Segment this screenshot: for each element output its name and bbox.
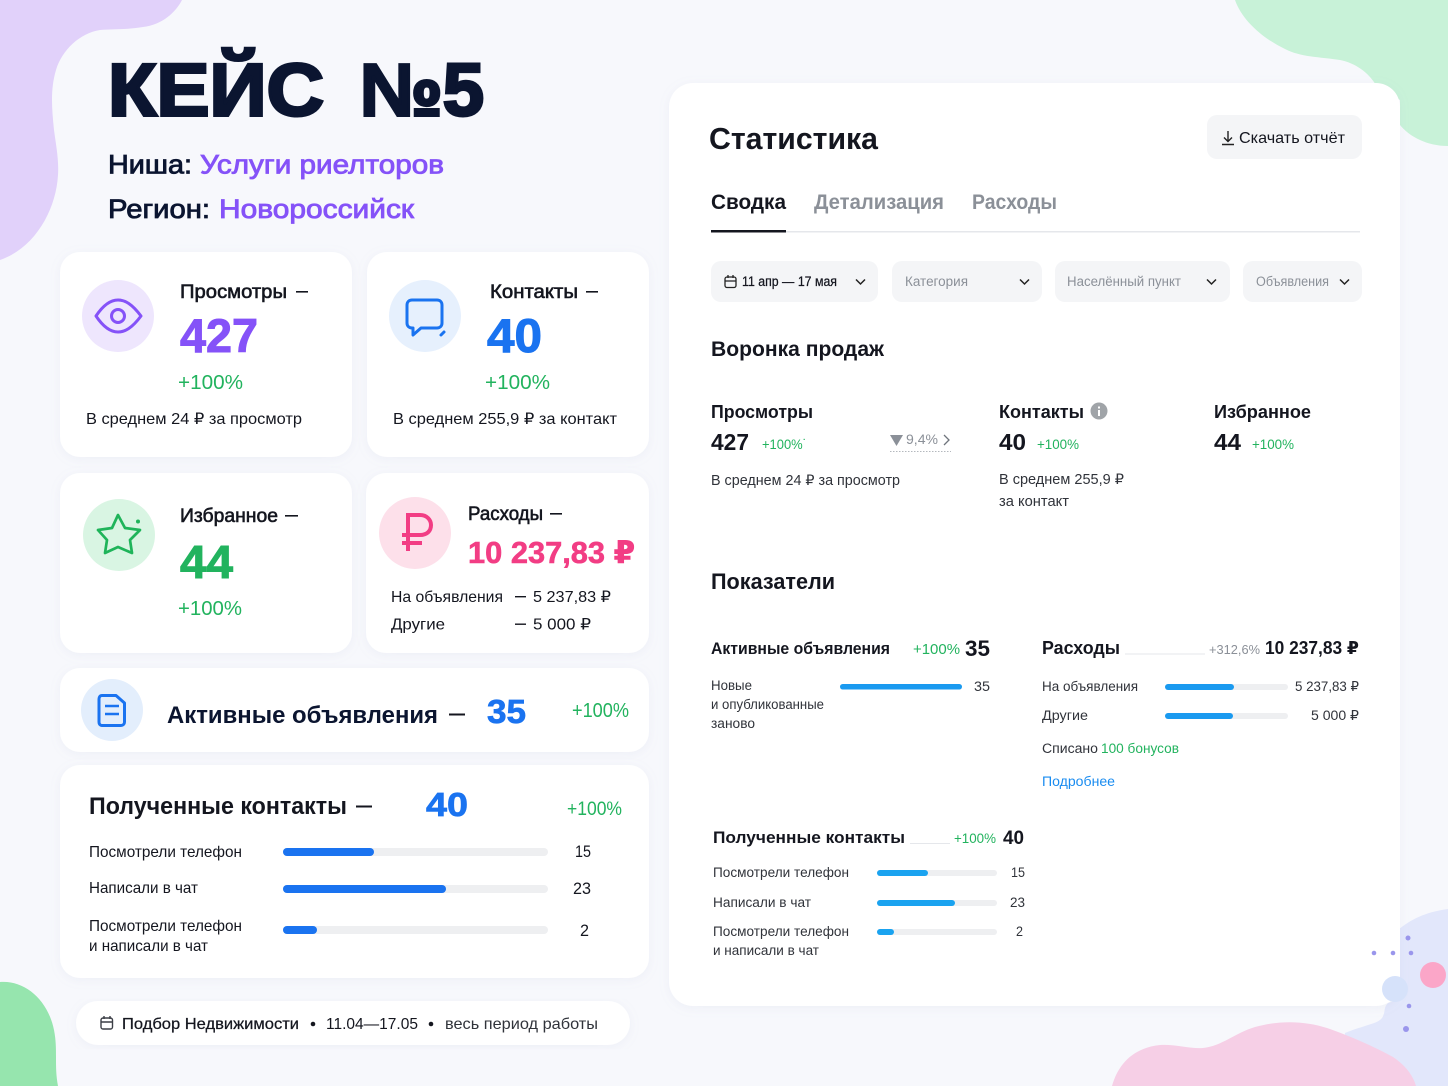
panel: contacts: Контакты <box>490 281 578 303</box>
funnel: favourites: +100% <box>1252 436 1294 452</box>
heading: sales funnel: Воронка продаж <box>711 338 885 361</box>
panel: active ads <box>60 668 649 752</box>
indicator: expenses: Другие <box>1042 708 1088 723</box>
panel: active ads: 35 <box>487 693 526 730</box>
funnel: views: +100%˙ <box>762 436 807 452</box>
panel: expenses: Расходы <box>468 504 543 525</box>
panel: favourites <box>60 473 352 653</box>
row: viewed phone <box>89 843 591 861</box>
indicator: expenses: 100 бонусов <box>1101 741 1179 756</box>
tabs: Сводка <box>711 191 786 214</box>
icon: calendar <box>101 1016 112 1029</box>
panel: favourites: 44 <box>180 536 233 588</box>
row: wrote in chat: 23 <box>573 880 591 898</box>
indicator: received contacts: 40 <box>1003 828 1024 849</box>
panel: views: +100% <box>178 371 243 394</box>
niche line: Услуги риелторов <box>200 150 444 180</box>
title <box>108 48 484 132</box>
indicator: active ads: и опубликованные <box>711 697 824 712</box>
footer pill: Подбор Недвижимости <box>122 1016 299 1033</box>
panel: views: В среднем 24 ₽ за просмотр <box>86 411 302 428</box>
filter: ads <box>1243 261 1362 302</box>
filter: date: 11 апр — 17 мая <box>742 274 837 289</box>
icon: document <box>81 679 143 741</box>
filter: city <box>1055 261 1230 302</box>
panel: expenses: 10 237,83 ₽ <box>468 535 635 570</box>
panel: contacts: +100% <box>485 371 550 394</box>
panel: views <box>60 252 352 457</box>
indicator: active ads <box>711 636 990 731</box>
row: both: 2 <box>580 922 589 940</box>
decorative dots over panel edge <box>1372 951 1408 1002</box>
indicator: received contacts: 2 <box>1016 924 1023 939</box>
region line <box>108 194 414 224</box>
filter: city: Населённый пункт <box>1067 274 1181 289</box>
icon: ruble <box>379 497 451 569</box>
row: both <box>89 918 589 955</box>
funnel: views: Просмотры <box>711 402 813 422</box>
funnel: contacts: В среднем 255,9 ₽ <box>999 472 1124 488</box>
indicator: received contacts: Посмотрели телефон <box>713 865 849 880</box>
indicator: expenses: Списано <box>1042 741 1098 756</box>
panel: views: 427 <box>180 309 258 362</box>
tabs <box>711 191 1360 232</box>
funnel: views <box>711 402 951 489</box>
heading: indicators: Показатели <box>711 569 835 594</box>
indicator: expenses: 5 000 ₽ <box>1311 708 1359 723</box>
indicator: active ads: +100% <box>913 641 960 658</box>
indicator: received contacts: Написали в чат <box>713 895 811 910</box>
tabs: Расходы <box>972 191 1057 214</box>
icon: eye <box>82 280 154 352</box>
indicator: expenses: +312,6% <box>1209 642 1260 657</box>
funnel: favourites <box>1214 402 1311 455</box>
funnel: contacts: за контакт <box>999 494 1069 510</box>
panel: contacts <box>367 252 649 457</box>
panel: views: Просмотры <box>180 281 287 303</box>
decorative circles and dots <box>1403 936 1446 1032</box>
icon: info <box>1090 402 1108 420</box>
button: download report <box>1207 115 1362 159</box>
funnel: favourites: Избранное <box>1214 402 1311 422</box>
panel: active ads: Активные объявления <box>167 702 438 729</box>
panel: statistics <box>669 83 1400 1006</box>
row: viewed phone: Посмотрели телефон <box>89 844 242 861</box>
tabs: Детализация <box>814 191 944 214</box>
panel: expenses: Другие <box>391 616 445 634</box>
indicator: received contacts <box>713 828 1025 958</box>
panel: active ads: +100% <box>572 700 629 722</box>
blob: green top right <box>1235 0 1448 146</box>
panel: contacts: В среднем 255,9 ₽ за контакт <box>393 411 618 428</box>
indicator: active ads: 35 <box>974 678 990 694</box>
panel: received contacts: Полученные контакты <box>89 793 347 820</box>
panel: expenses: На объявления <box>391 589 503 606</box>
funnel: contacts: +100% <box>1037 436 1079 452</box>
filter: category <box>892 261 1042 302</box>
title: №5 <box>360 48 484 132</box>
row: both: и написали в чат <box>89 938 209 955</box>
row: both: Посмотрели телефон <box>89 918 242 935</box>
filter: category: Категория <box>905 274 968 289</box>
footer pill: 11.04—17.05 <box>326 1016 418 1033</box>
funnel: contacts <box>999 402 1124 510</box>
footer pill <box>76 1001 630 1045</box>
panel: contacts: 40 <box>487 309 542 362</box>
indicator: expenses: Расходы <box>1042 638 1120 658</box>
panel: expenses <box>366 473 649 653</box>
niche line <box>108 150 444 180</box>
indicator: received contacts: и написали в чат <box>713 943 819 958</box>
indicator: expenses <box>1042 638 1359 789</box>
indicator: expenses: Подробнее <box>1042 773 1115 789</box>
blob: lavender bottom right <box>1345 909 1448 1086</box>
region line: Регион: <box>108 194 210 224</box>
heading: statistics: Статистика <box>709 121 879 156</box>
blob: purple top left <box>0 0 182 260</box>
row: wrote in chat: Написали в чат <box>89 880 199 897</box>
filter: date <box>711 261 878 302</box>
funnel: contacts: 40 <box>999 429 1026 455</box>
indicator: active ads: заново <box>711 716 755 731</box>
indicator: received contacts: 15 <box>1011 865 1025 880</box>
indicator: active ads: Активные объявления <box>711 639 890 658</box>
funnel: favourites: 44 <box>1214 429 1241 455</box>
funnel: contacts: Контакты <box>999 402 1084 422</box>
panel: favourites: +100% <box>178 598 242 620</box>
blob: pink bottom <box>1112 1022 1416 1086</box>
row: viewed phone: 15 <box>575 843 591 861</box>
blob: green bottom left <box>0 982 58 1086</box>
panel: received contacts: +100% <box>567 799 622 820</box>
niche line: Ниша: <box>108 150 192 180</box>
panel: expenses: 5 000 ₽ <box>533 616 591 634</box>
funnel: views: В среднем 24 ₽ за просмотр <box>711 473 900 489</box>
indicator: received contacts: 23 <box>1010 895 1025 910</box>
indicator: expenses: 10 237,83 ₽ <box>1265 638 1359 658</box>
panel: received contacts: 40 <box>426 786 468 823</box>
panel: received contacts <box>60 765 649 978</box>
indicator: active ads: 35 <box>965 636 990 661</box>
footer pill: весь период работы <box>445 1016 598 1033</box>
region line: Новороссийск <box>219 194 414 224</box>
indicator: expenses: 5 237,83 ₽ <box>1295 679 1359 694</box>
indicator: received contacts: +100% <box>954 830 996 846</box>
filter: ads: Объявления <box>1256 274 1329 289</box>
panel: expenses: 5 237,83 ₽ <box>533 589 611 606</box>
button: download report: Скачать отчёт <box>1239 130 1346 147</box>
indicator: expenses: На объявления <box>1042 679 1138 694</box>
indicator: received contacts: Посмотрели телефон <box>713 924 849 939</box>
indicator: active ads: Новые <box>711 678 752 693</box>
title: КЕЙС <box>108 48 324 132</box>
funnel: views: 427 <box>711 429 749 455</box>
icon: chat bubble <box>389 280 461 352</box>
funnel: views: 9,4% <box>906 432 938 447</box>
row: wrote in chat <box>89 880 591 898</box>
indicator: received contacts: Полученные контакты <box>713 828 905 847</box>
icon: star <box>83 499 155 571</box>
panel: favourites: Избранное <box>180 505 278 527</box>
